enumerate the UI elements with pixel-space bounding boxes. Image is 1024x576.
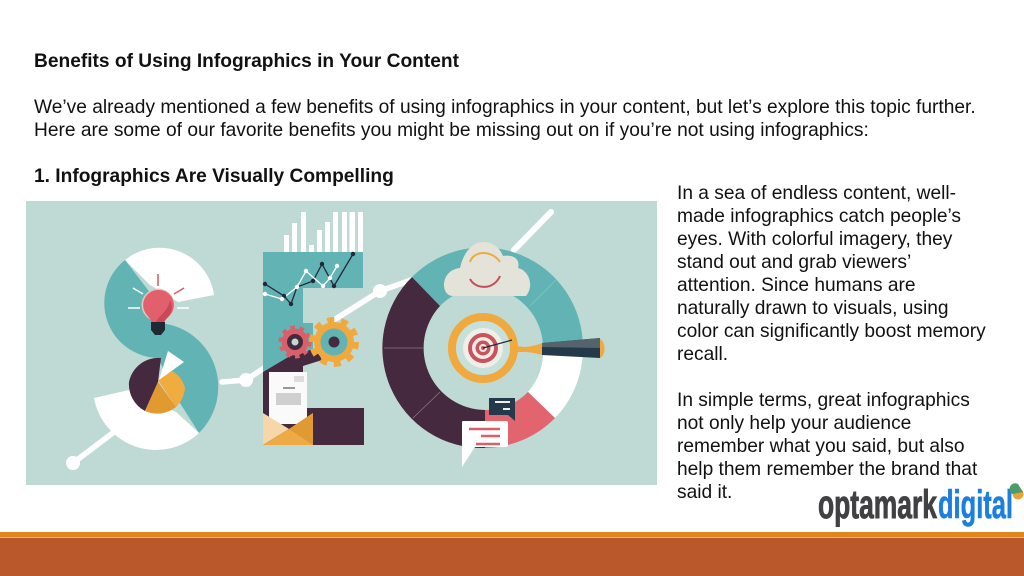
title: Benefits of Using Infographics in Your Content xyxy=(34,51,459,72)
right text column xyxy=(677,183,986,503)
right text column: In a sea of endless content, well- xyxy=(677,183,956,204)
letter O ring xyxy=(382,242,604,467)
right text column: help them remember the brand that xyxy=(677,459,977,480)
logo: optamark xyxy=(818,483,937,527)
right text column: color can significantly boost memory xyxy=(677,321,986,342)
right text column: remember what you said, but also xyxy=(677,436,964,457)
right text column: stand out and grab viewers’ xyxy=(677,252,911,273)
section heading: 1. Infographics Are Visually Compelling xyxy=(34,166,394,187)
right text column: said it. xyxy=(677,482,732,503)
icon: orange gear xyxy=(312,320,356,364)
intro paragraph: We’ve already mentioned a few benefits of using infographics in your content, but let’s explore this topic further. xyxy=(34,97,976,118)
envelope xyxy=(263,413,313,445)
right text column: attention. Since humans are xyxy=(677,275,916,296)
icon: dark speech bubble xyxy=(489,398,515,421)
footer band xyxy=(0,532,1024,576)
icon: light bulb xyxy=(128,274,189,335)
right text column: In simple terms, great infographics xyxy=(677,390,970,411)
right text column: naturally drawn to visuals, using xyxy=(677,298,949,319)
icon: white speech bubble xyxy=(462,421,508,467)
right text column: made infographics catch people’s xyxy=(677,206,961,227)
icon: red gear xyxy=(280,328,310,356)
letter S xyxy=(94,248,218,450)
right text column: eyes. With colorful imagery, they xyxy=(677,229,952,250)
document xyxy=(269,372,307,424)
right text column: not only help your audience xyxy=(677,413,911,434)
intro paragraph: Here are some of our favorite benefits you might be missing out on if you’re not using infographics: xyxy=(34,120,869,141)
SEO illustration xyxy=(26,201,657,485)
bar chart xyxy=(284,212,363,252)
letter E xyxy=(263,212,364,445)
intro paragraph xyxy=(34,97,976,141)
growth line xyxy=(66,212,551,470)
pie chart xyxy=(129,351,185,414)
icon: logo droplet xyxy=(1010,483,1024,500)
icon: magnifier and target xyxy=(452,317,604,379)
right text column: recall. xyxy=(677,344,728,365)
icon: cloud xyxy=(444,242,530,296)
line chart xyxy=(263,252,355,306)
